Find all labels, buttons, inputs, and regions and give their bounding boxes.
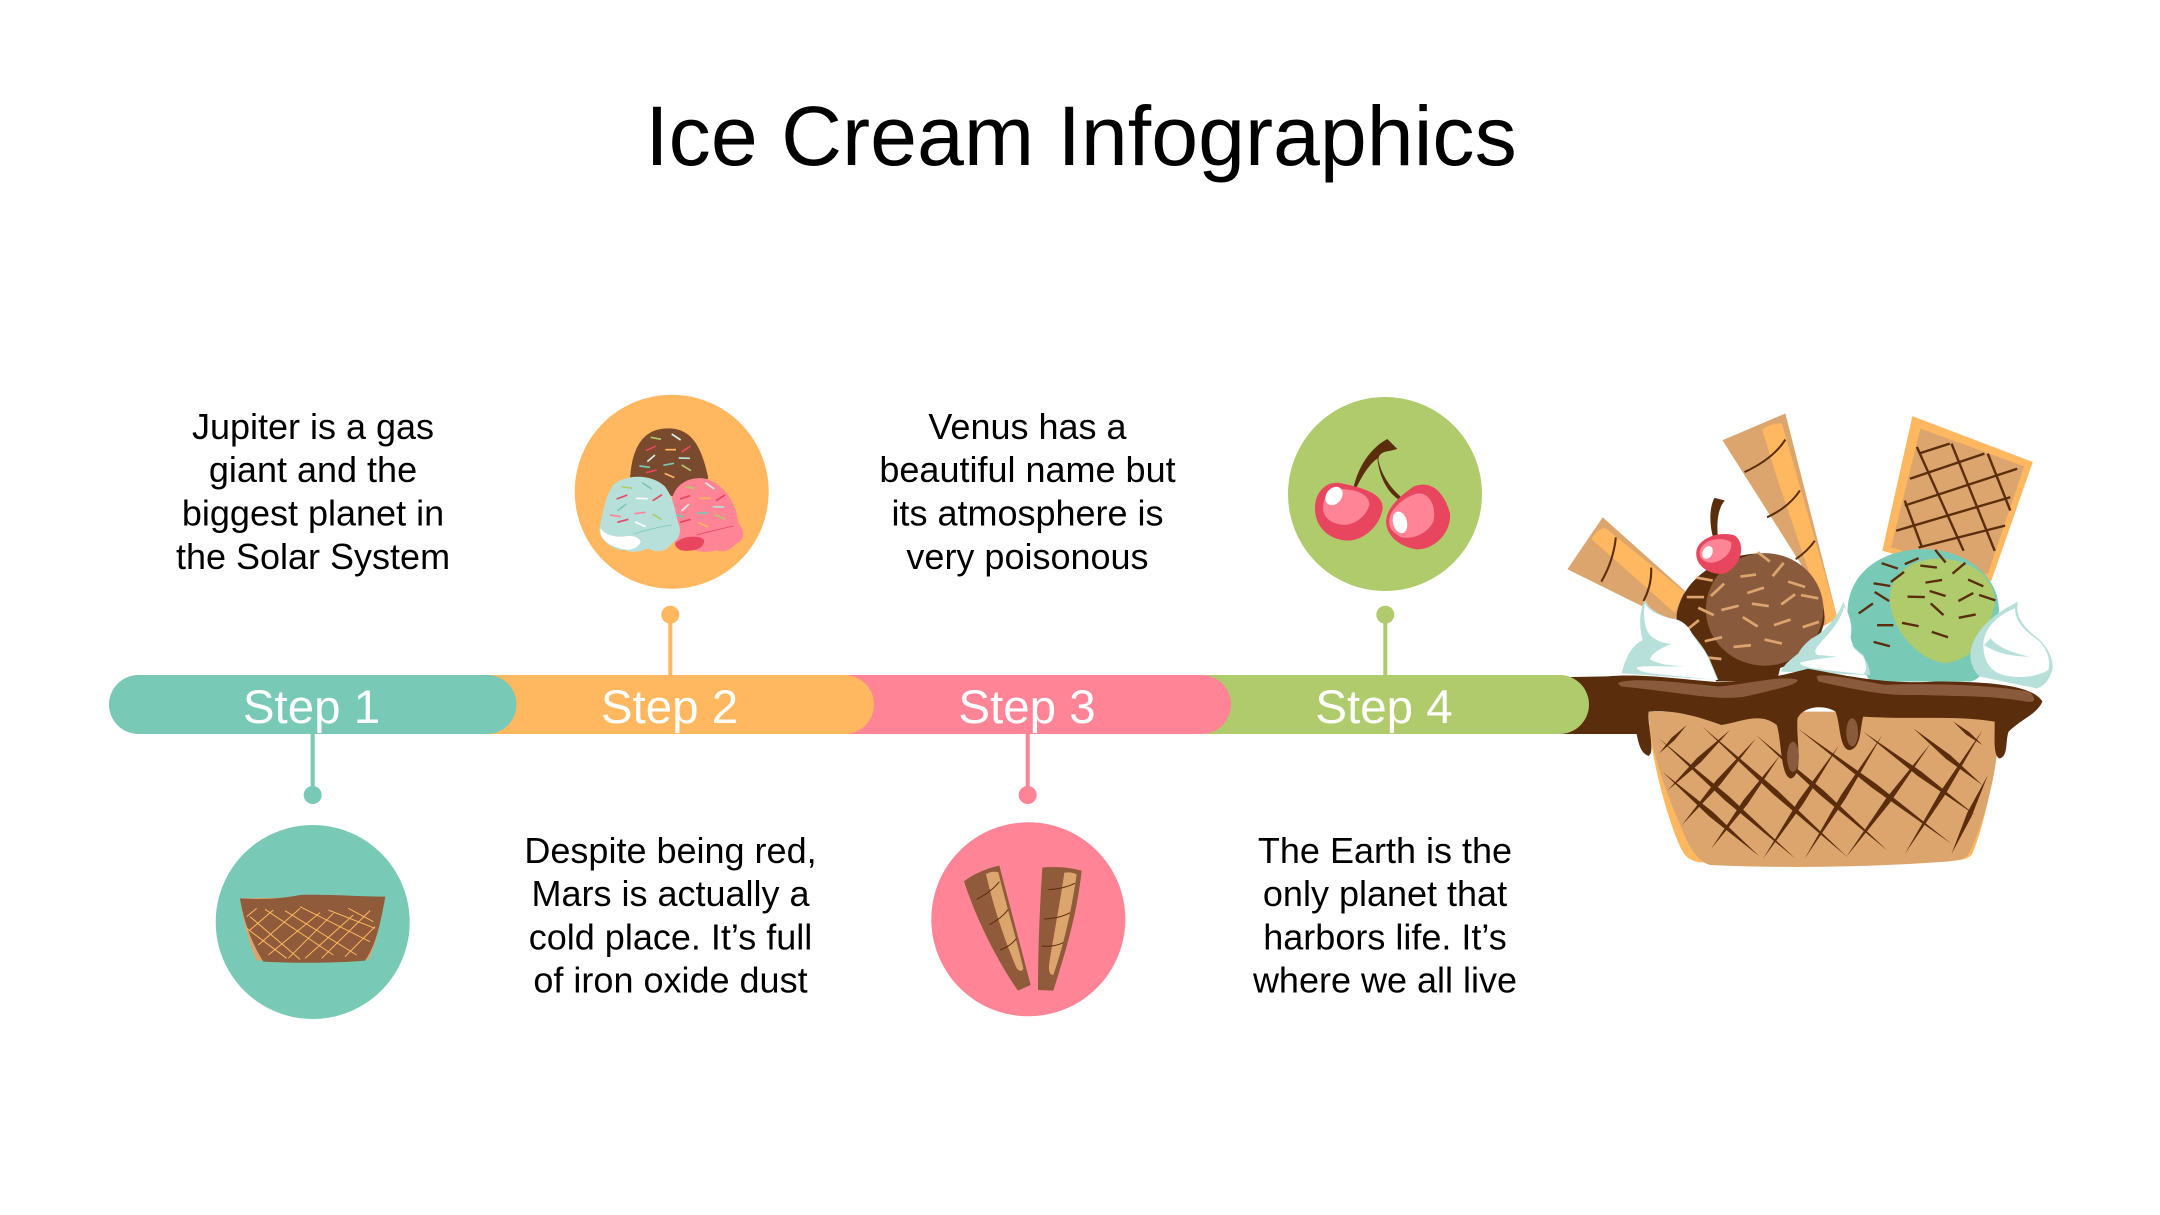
circle icon: wafer rolls	[931, 822, 1125, 1016]
text: step 1: giant and the	[209, 449, 417, 490]
text: step 4: where we all live	[1252, 960, 1517, 1000]
left wafer roll	[1567, 517, 1685, 621]
whipped cream: right	[1970, 602, 2053, 688]
step 3 segment	[820, 675, 1231, 734]
step 2 segment	[460, 675, 874, 734]
step 2 segment: Step 2	[601, 681, 738, 734]
waffle basket	[1649, 712, 2000, 867]
text: step 1: biggest planet in	[182, 492, 444, 534]
step 4 segment	[1180, 675, 1589, 734]
text: step 2: cold place. It’s full	[529, 916, 812, 958]
step 3 segment: Step 3	[958, 681, 1096, 734]
middle wafer roll	[1722, 413, 1837, 631]
text: step 2: Despite being red,	[524, 830, 817, 871]
step 1 segment: Step 1	[243, 681, 380, 734]
connector: step 4	[1376, 606, 1394, 675]
teal and green scoop	[1847, 549, 1999, 681]
connector: step 2	[661, 606, 679, 675]
chocolate scoop	[1676, 552, 1825, 681]
text: step 2: of iron oxide dust	[533, 960, 808, 1000]
title: Ice Cream Infographics	[645, 89, 1517, 183]
step 4 segment: Step 4	[1315, 681, 1453, 734]
text: step 3: beautiful name but	[879, 449, 1176, 490]
text: step 4: only planet that	[1263, 873, 1507, 914]
whipped cream: middle	[1781, 602, 1870, 675]
text: step 1: Jupiter is a gas	[192, 406, 434, 447]
circle icon: three scoops	[575, 395, 769, 589]
chocolate drizzle	[1552, 669, 2042, 779]
step 1 segment	[109, 675, 516, 734]
text: step 3: very poisonous	[906, 536, 1149, 577]
text: step 2: Mars is actually a	[531, 873, 811, 914]
text: step 4: harbors life. It’s	[1263, 916, 1507, 958]
text: step 1: the Solar System	[176, 536, 450, 577]
cherry on top	[1696, 498, 1741, 574]
circle icon: cherries	[1288, 397, 1482, 591]
right flat wafer	[1882, 416, 2033, 581]
whipped cream: left	[1622, 600, 1718, 680]
illustration: ice cream waffle basket	[1552, 413, 2053, 867]
circle icon: waffle bowl	[216, 825, 410, 1019]
text: step 3: Venus has a	[928, 406, 1128, 447]
text: step 3: its atmosphere is	[891, 492, 1164, 534]
timeline bar	[109, 675, 1589, 734]
connector: step 3	[1019, 734, 1037, 804]
text: step 4: The Earth is the	[1258, 830, 1512, 871]
connector: step 1	[304, 734, 322, 804]
